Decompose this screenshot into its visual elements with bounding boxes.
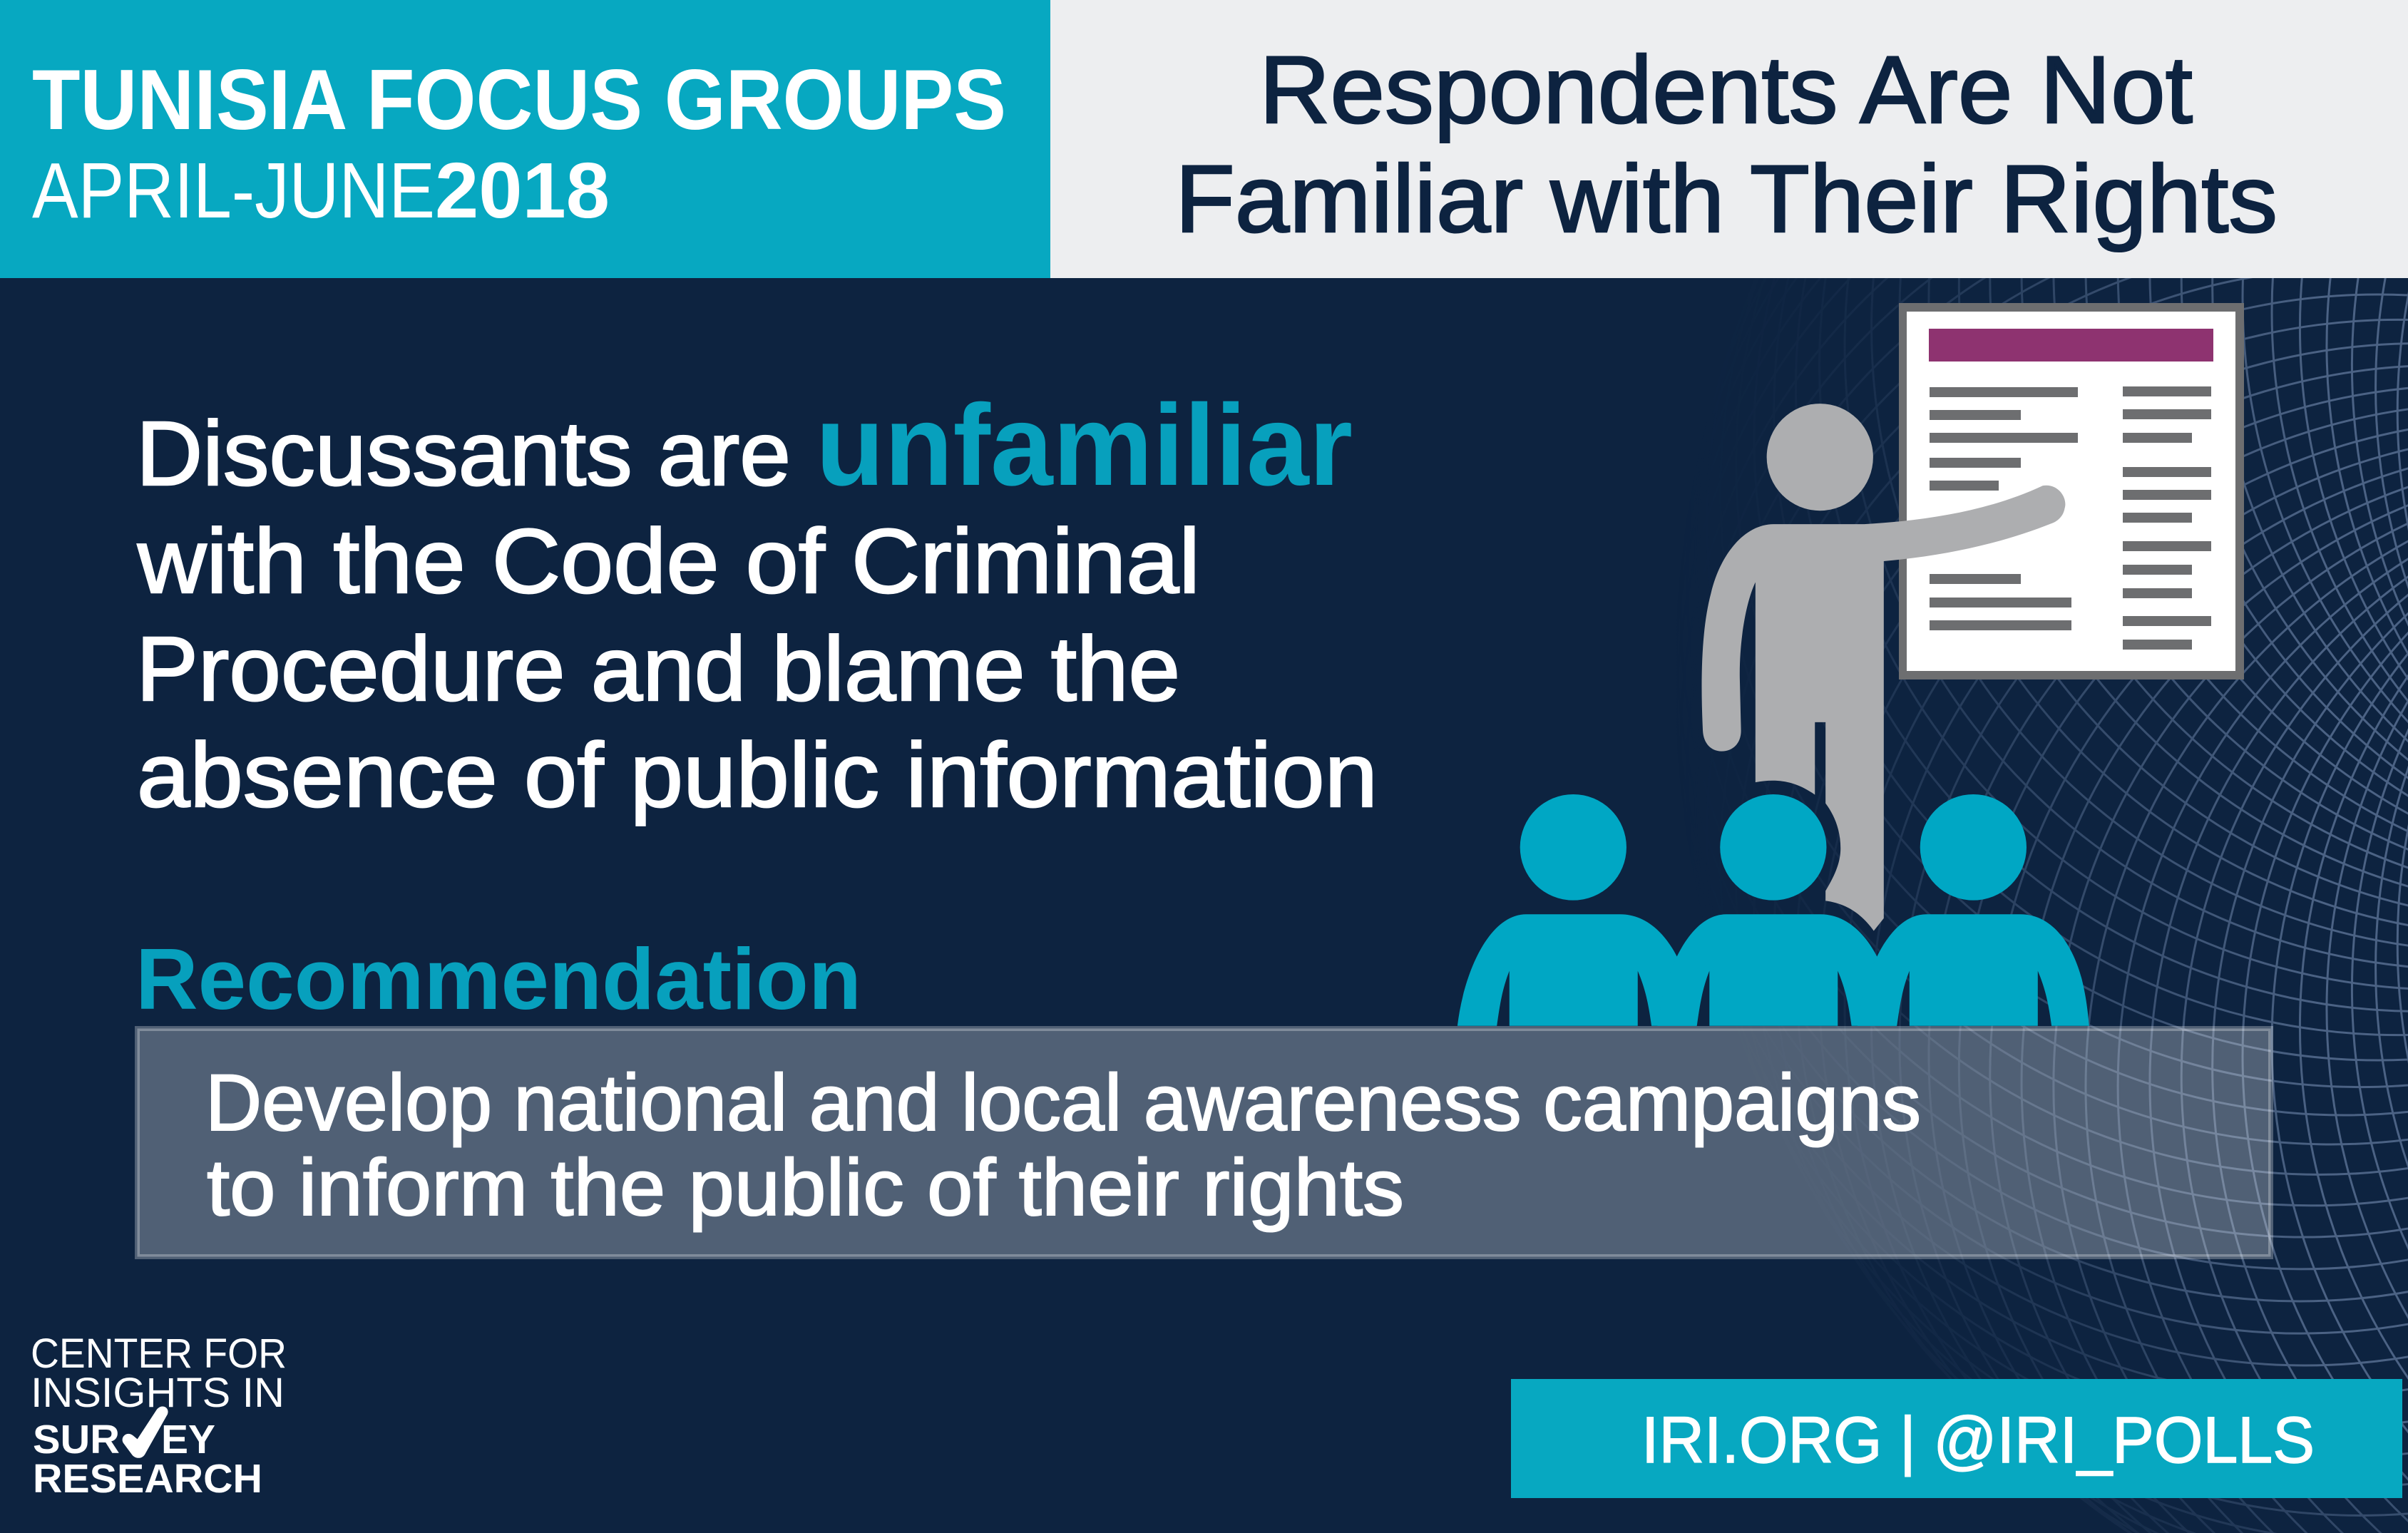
person three — [1858, 794, 2089, 1026]
recommendation text — [205, 1058, 1921, 1232]
person one — [1457, 794, 1696, 1026]
icon: presenter figure — [1701, 404, 2065, 930]
heading: recommendation: Recommendation — [135, 930, 861, 1027]
icon: presentation board — [1899, 303, 2244, 680]
main finding text: Procedure and blame the — [136, 618, 1180, 720]
date range: APRIL-JUNE — [32, 147, 435, 235]
logo: Center for Insights in Survey Research — [31, 1331, 287, 1502]
header: survey name panel — [0, 0, 1050, 278]
title text — [1175, 37, 2278, 252]
recommendation text: Develop national and local awareness campaigns — [205, 1058, 1921, 1147]
footer: website and social handle — [1511, 1379, 2402, 1498]
background mesh pattern — [1814, 278, 2408, 1533]
recommendation text: to inform the public of their rights — [207, 1143, 1404, 1232]
panel: recommendation box — [137, 1028, 2270, 1256]
main finding text: with the Code of Criminal — [137, 511, 1200, 612]
icon: check mark — [123, 1406, 168, 1458]
main finding text: unfamiliar — [816, 381, 1353, 510]
person two — [1657, 794, 1897, 1026]
title text: Familiar with Their Rights — [1175, 146, 2278, 252]
heading: Tunisia Focus Groups: TUNISIA FOCUS GROUPS — [32, 52, 1006, 148]
header: title panel — [1050, 0, 2408, 278]
main finding text — [136, 381, 1378, 826]
logo: Center for Insights in Survey Research: RESEARCH — [33, 1456, 262, 1502]
main finding text: absence of public information — [137, 724, 1378, 826]
title text: Respondents Are Not — [1259, 37, 2193, 143]
main finding text: Discussants are — [136, 403, 791, 505]
logo: Center for Insights in Survey Research: EY — [161, 1417, 215, 1462]
logo: Center for Insights in Survey Research: INSIGHTS IN — [31, 1370, 285, 1416]
date range: 2018 — [435, 147, 610, 235]
logo: Center for Insights in Survey Research: SUR — [33, 1417, 120, 1462]
footer: website and social handle: IRI.ORG | @IRI_POLLS — [1641, 1404, 2315, 1477]
logo: Center for Insights in Survey Research: CENTER FOR — [31, 1331, 287, 1377]
icon: audience of three people — [1457, 794, 2089, 1026]
